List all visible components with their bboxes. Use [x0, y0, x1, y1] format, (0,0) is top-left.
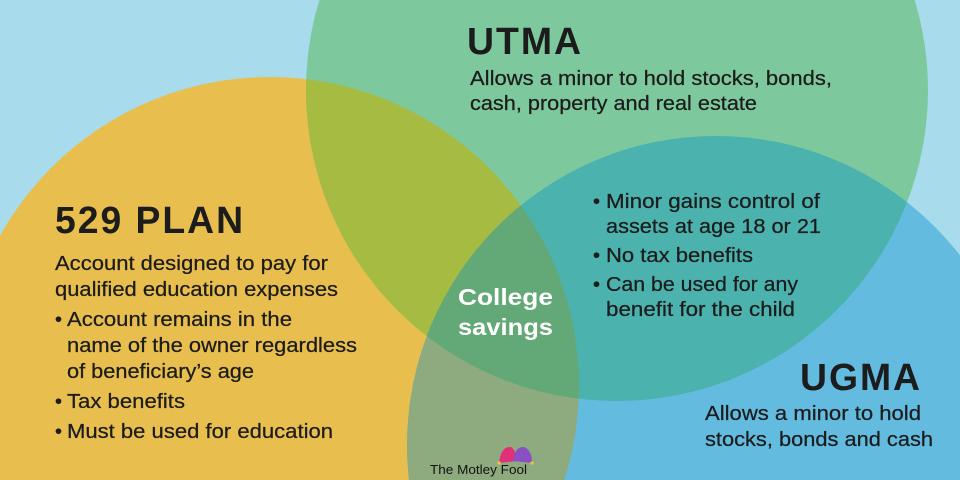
text: UTMA/UGMA shared bullets: Can be used for any [606, 274, 798, 296]
text: 529 plan description: name of the owner regardless [67, 335, 357, 357]
text: 529 plan description [55, 253, 357, 443]
center label: College savings: College [458, 284, 553, 310]
text: 529 plan description: • [55, 421, 62, 443]
text: UTMA/UGMA shared bullets: benefit for the child [606, 299, 795, 321]
circle: UGMA [407, 136, 960, 480]
text: UTMA description: cash, property and real estate [470, 93, 757, 115]
text: UTMA description [470, 68, 832, 115]
text: 529 plan description: Must be used for education [67, 421, 333, 443]
logo: The Motley Fool [430, 447, 534, 477]
text: UTMA/UGMA shared bullets: • [593, 274, 600, 296]
text: UGMA description: stocks, bonds and cash [705, 429, 933, 451]
text: UTMA/UGMA shared bullets: • [593, 245, 600, 267]
center label: College savings: savings [458, 314, 553, 340]
text: 529 plan description: qualified education expenses [55, 279, 338, 301]
text: 529 plan description: • [55, 391, 62, 413]
text: UTMA/UGMA shared bullets: assets at age 18 or 21 [606, 216, 821, 238]
heading: UGMA: UGMA [800, 357, 922, 399]
circle: UTMA [306, 0, 928, 401]
text: UGMA description [705, 403, 933, 451]
text: 529 plan description: Tax benefits [67, 391, 185, 413]
text: UTMA description: Allows a minor to hold stocks, bonds, [470, 68, 832, 90]
text: UTMA/UGMA shared bullets [593, 191, 821, 321]
text: UTMA/UGMA shared bullets: Minor gains control of [606, 191, 820, 213]
text: 529 plan description: • [55, 309, 62, 331]
text: 529 plan description: Account remains in the [67, 309, 292, 331]
text: 529 plan description: of beneficiary’s age [67, 361, 254, 383]
logo: The Motley Fool: The Motley Fool [430, 462, 527, 477]
text: UTMA/UGMA shared bullets: No tax benefits [606, 245, 753, 267]
heading: 529 PLAN: 529 PLAN [55, 200, 245, 242]
center label: College savings [458, 284, 553, 340]
circle: 529 plan [0, 77, 579, 480]
text: 529 plan description: Account designed to pay for [55, 253, 328, 275]
text: UGMA description: Allows a minor to hold [705, 403, 921, 425]
heading: UTMA: UTMA [467, 21, 583, 63]
text: UTMA/UGMA shared bullets: • [593, 191, 600, 213]
